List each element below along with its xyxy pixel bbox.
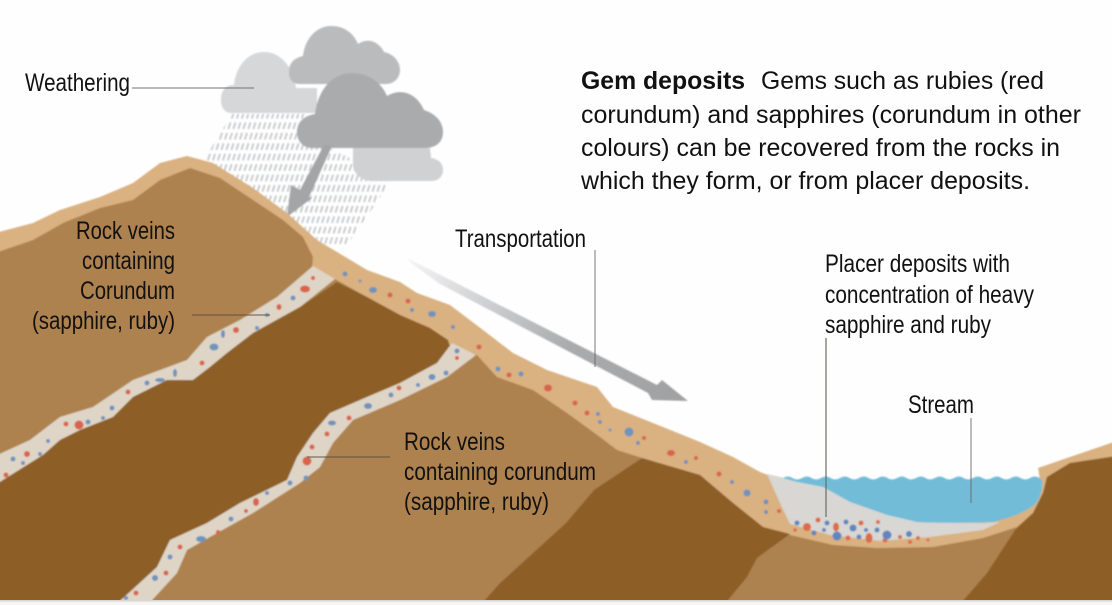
- label: placer deposits: Placer deposits with: [825, 250, 1010, 278]
- heading and description: Gems such as rubies (red: [761, 67, 1044, 95]
- bottom edge strip: [0, 600, 1112, 605]
- label: rock veins containing corundum, lower: Rock veins: [404, 428, 505, 456]
- dark rock band: [0, 282, 450, 605]
- label: rock veins containing corundum, upper: [32, 217, 175, 335]
- cloud: medium back: [289, 26, 400, 84]
- gems: vein 1: [4, 276, 315, 478]
- label: rock veins containing corundum, upper: Corundum: [80, 277, 175, 305]
- cloud: light lower right: [353, 148, 443, 181]
- cloud: light left: [221, 52, 317, 113]
- label: placer deposits: concentration of heavy: [825, 281, 1034, 309]
- sediment: [767, 474, 1000, 541]
- label: rock veins containing corundum, lower: (sapphire, ruby): [404, 488, 549, 516]
- vein 2: [110, 343, 476, 605]
- label: rock veins containing corundum, upper: (sapphire, ruby): [32, 307, 175, 335]
- label: rock veins containing corundum, lower: [404, 428, 596, 516]
- gems: soil slope: [342, 272, 781, 514]
- heading and description: corundum) and sapphires (corundum in other: [581, 101, 1081, 129]
- heading and description: which they form, or from placer deposits.: [580, 167, 1030, 195]
- label: stream: Stream: [908, 391, 974, 419]
- label: transportation: Transportation: [455, 225, 586, 253]
- heading and description: colours) can be recovered from the rocks in: [581, 134, 1060, 162]
- rain: [206, 114, 386, 244]
- label: weathering: Weathering: [25, 69, 130, 97]
- vein 1: [0, 266, 335, 485]
- ground: base rock: [0, 168, 1112, 605]
- arrow: transportation: [407, 258, 688, 401]
- cloud: dark front: [297, 73, 443, 148]
- label: placer deposits: sapphire and ruby: [825, 311, 991, 339]
- dark rock: right: [955, 456, 1112, 605]
- gems: vein 2: [124, 348, 460, 600]
- leader lines: [132, 88, 971, 517]
- heading and description: [580, 67, 1081, 195]
- arrow: weathering down to hill: [287, 145, 332, 217]
- dark rock: lower mid: [476, 458, 790, 605]
- label: rock veins containing corundum, upper: containing: [82, 247, 175, 275]
- stream water: [783, 476, 1042, 523]
- ground: soil layer: [0, 156, 1112, 605]
- label: rock veins containing corundum, upper: Rock veins: [76, 217, 175, 245]
- label: rock veins containing corundum, lower: containing corundum: [404, 458, 596, 486]
- gems: placer concentration: [793, 518, 930, 544]
- label: placer deposits: [825, 250, 1034, 339]
- heading and description: Gem deposits: [581, 67, 745, 95]
